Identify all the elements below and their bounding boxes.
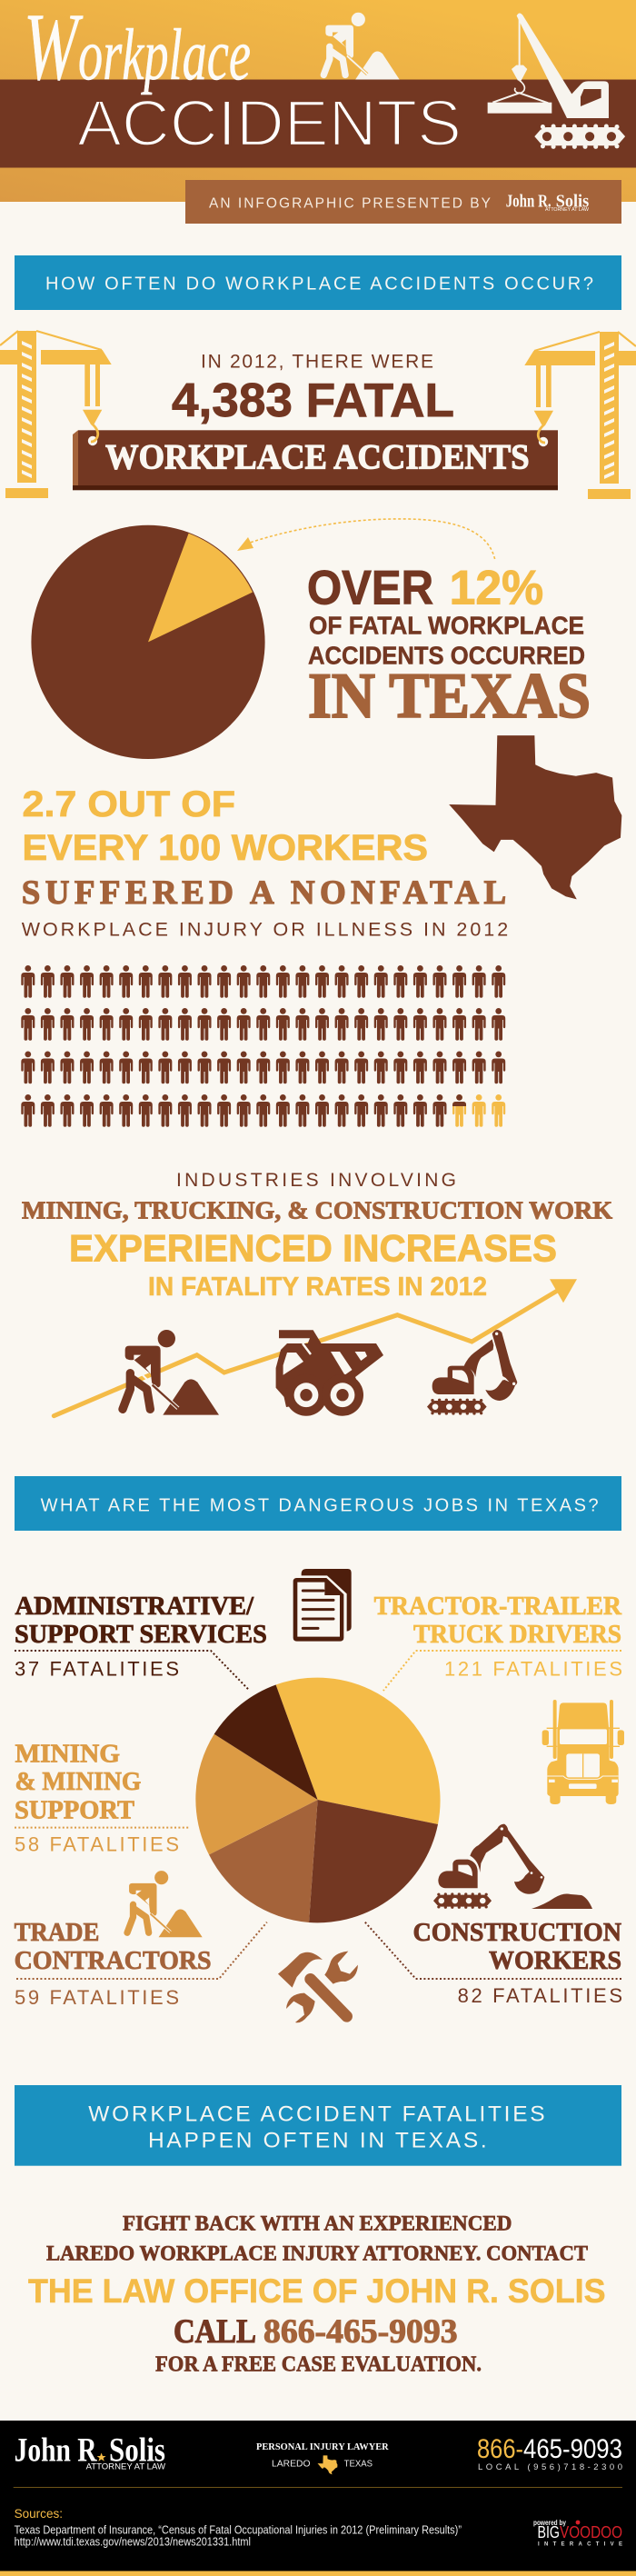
header band	[0, 80, 636, 167]
pictogram: 100 workers	[21, 965, 505, 1127]
label: trade contractors: 59 FATALITIES	[15, 1986, 179, 2009]
footer phone: 465-9093	[523, 2434, 622, 2464]
footer panel	[0, 2421, 636, 2576]
section banner: how often	[15, 255, 621, 310]
icon: excavator and dirt	[433, 1824, 592, 1909]
icon: worker with shovel	[123, 1330, 219, 1415]
call to action: THE LAW OFFICE OF JOHN R. SOLIS	[28, 2271, 605, 2310]
label: administrative: ADMINISTRATIVE/	[15, 1592, 254, 1621]
call to action: FOR A FREE CASE EVALUATION.	[155, 2352, 482, 2377]
call to action: CALL	[174, 2313, 256, 2351]
icon: documents	[293, 1569, 352, 1642]
icon: hammer and wrench	[278, 1952, 358, 2022]
presented-by box	[185, 180, 621, 224]
label: tractor-trailer: TRUCK DRIVERS	[413, 1620, 621, 1649]
footer sources: Texas Department of Insurance, “Census of Fatal Occupational Injuries in 2012 (Preliminary Results)”	[15, 2523, 462, 2536]
label: administrative: SUPPORT SERVICES	[15, 1620, 267, 1649]
footer sources: Sources:	[15, 2506, 63, 2521]
label: mining: MINING	[15, 1739, 120, 1768]
text: experienced increases: EXPERIENCED INCREASES	[69, 1227, 557, 1270]
text: workplace injury: WORKPLACE INJURY OR ILLNESS IN 2012	[22, 919, 508, 941]
crane right	[524, 332, 636, 499]
section banner: fatalities happen often: HAPPEN OFTEN IN TEXAS.	[148, 2129, 487, 2153]
call to action	[28, 2212, 605, 2377]
icon: header worker	[323, 13, 400, 79]
icon: header crane	[488, 13, 625, 149]
footer logo	[15, 2432, 166, 2471]
call to action: LAREDO WORKPLACE INJURY ATTORNEY. CONTACT	[46, 2242, 588, 2265]
label: mining: & MINING	[15, 1767, 141, 1796]
text: industries involving: INDUSTRIES INVOLVING	[176, 1170, 456, 1191]
text: in texas: IN TEXAS	[308, 661, 591, 732]
section banner: fatalities happen often: WORKPLACE ACCIDENT FATALITIES	[88, 2102, 545, 2127]
sign: workplace accidents	[73, 424, 558, 490]
text: in 2012: IN 2012, THERE WERE	[201, 351, 433, 372]
footer sources: http://www.tdi.texas.gov/news/2013/news201331.html	[15, 2535, 251, 2548]
footer logo: John R	[15, 2432, 98, 2470]
text: accidents occurred: ACCIDENTS OCCURRED	[308, 642, 585, 669]
footer tagline: PERSONAL INJURY LAWYER	[256, 2442, 389, 2452]
line chart: rising arrow	[54, 1279, 577, 1416]
label: construction workers	[365, 1918, 622, 2007]
icon: dump truck	[276, 1330, 383, 1416]
label: mining	[15, 1739, 189, 1856]
label: trade contractors: CONTRACTORS	[15, 1946, 212, 1975]
pie chart: jobs	[195, 1678, 441, 1922]
section banner: dangerous jobs: WHAT ARE THE MOST DANGEROUS JOBS IN TEXAS?	[41, 1495, 599, 1515]
footer agency logo: BIG	[538, 2523, 560, 2541]
sign: workplace accidents: WORKPLACE ACCIDENTS	[105, 437, 530, 476]
text: of fatal workplace: OF FATAL WORKPLACE	[309, 611, 584, 640]
firm logo small	[506, 192, 590, 213]
text: suffered a nonfatal: SUFFERED A NONFATAL	[22, 874, 506, 912]
label: construction workers: WORKERS	[489, 1946, 621, 1975]
footer tagline	[256, 2442, 389, 2474]
label: construction workers: 82 FATALITIES	[458, 1984, 622, 2007]
footer phone: 866-	[477, 2434, 523, 2464]
section banner: dangerous jobs	[15, 1476, 621, 1531]
footer agency logo	[533, 2519, 622, 2548]
firm logo small: John R.	[506, 192, 552, 212]
section banner: how often: HOW OFTEN DO WORKPLACE ACCIDENTS OCCUR?	[45, 275, 593, 295]
text: 4,383 fatal: 4,383 FATAL	[172, 374, 454, 427]
label: administrative: 37 FATALITIES	[15, 1658, 179, 1681]
crane left	[0, 331, 112, 498]
icon: semi truck	[542, 1700, 624, 1804]
label: mining: 58 FATALITIES	[15, 1833, 179, 1856]
label: mining: SUPPORT	[15, 1795, 134, 1824]
call to action: FIGHT BACK WITH AN EXPERIENCED	[123, 2212, 512, 2235]
footer sources	[15, 2506, 462, 2548]
call to action: 866-465-9093	[263, 2313, 458, 2351]
footer phone: LOCAL (956)718-2300	[478, 2462, 622, 2472]
text: mining trucking construction: MINING, TRUCKING, & CONSTRUCTION WORK	[22, 1196, 613, 1224]
firm logo small: ATTORNEY AT LAW	[545, 207, 590, 213]
text: every 100 workers: EVERY 100 WORKERS	[22, 828, 428, 868]
footer agency logo: INTERACTIVE	[538, 2542, 622, 2548]
label: tractor-trailer: TRACTOR-TRAILER	[374, 1592, 622, 1621]
text: in fatality rates: IN FATALITY RATES IN 2012	[148, 1273, 487, 1302]
icon: excavator	[427, 1330, 517, 1415]
icon: tan worker	[127, 1871, 203, 1937]
label: trade contractors: TRADE	[15, 1918, 99, 1947]
text: over 12%: OVER	[307, 562, 433, 614]
title: ACCIDENTS: ACCIDENTS	[77, 88, 462, 160]
label: construction workers: CONSTRUCTION	[412, 1918, 621, 1947]
arrow: dashed to wedge	[237, 519, 495, 559]
footer tagline: LAREDO	[272, 2458, 311, 2469]
label: administrative	[15, 1592, 267, 1690]
label: tractor-trailer: 121 FATALITIES	[444, 1658, 622, 1681]
label: trade contractors	[15, 1918, 267, 2009]
section banner: fatalities happen often	[15, 2085, 621, 2166]
pie chart: texas share	[31, 525, 265, 759]
presented-by text: AN INFOGRAPHIC PRESENTED BY	[209, 195, 491, 211]
text: 12 percent: 12%	[450, 562, 543, 614]
header panel	[0, 0, 636, 202]
footer logo: Solis	[109, 2432, 165, 2470]
text: 2.7 out of: 2.7 OUT OF	[22, 784, 235, 824]
label: tractor-trailer	[374, 1592, 622, 1691]
map: texas	[449, 735, 621, 899]
footer agency logo: powered by	[533, 2519, 566, 2527]
firm logo small: Solis	[556, 192, 589, 212]
footer logo: ATTORNEY AT LAW	[86, 2461, 166, 2471]
footer phone	[477, 2434, 622, 2472]
footer tagline: TEXAS	[344, 2458, 373, 2469]
footer agency logo: VOODOO	[560, 2523, 622, 2541]
